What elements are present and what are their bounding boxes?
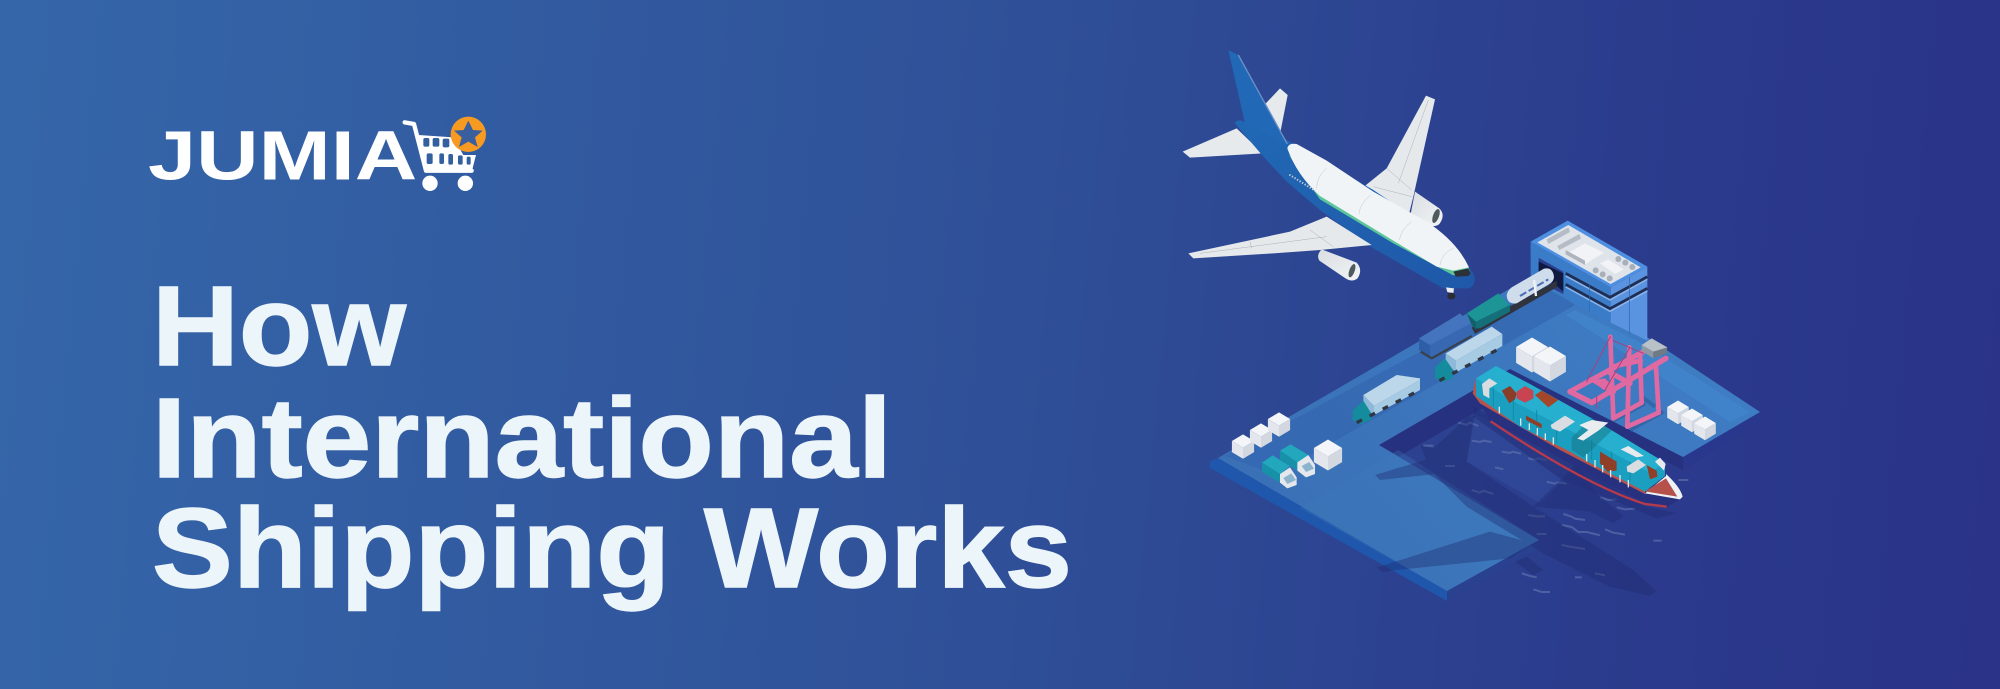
platform sides: [1210, 369, 1760, 601]
port platform: [1210, 277, 1760, 601]
building: [1531, 221, 1647, 341]
title line 3: Shipping Works: [152, 485, 1072, 611]
crane machine house: [1642, 338, 1667, 358]
far engine: [1411, 192, 1443, 226]
building roof: [1531, 221, 1647, 287]
brown and white containers: [1482, 378, 1666, 479]
red deck edge: [1473, 378, 1645, 494]
road strip: [1225, 285, 1575, 475]
crane boom: [1570, 352, 1666, 403]
crane cables: [1587, 337, 1643, 408]
white cargo boxes: [1232, 337, 1716, 471]
landing gear: [1446, 287, 1455, 299]
truck: front lane: [1353, 375, 1420, 424]
crane shadow: [1613, 397, 1663, 430]
truck: rear lane: [1435, 327, 1502, 382]
pink gantry crane: [1570, 337, 1667, 427]
title line 2: International: [152, 375, 892, 501]
bow: [1645, 474, 1683, 499]
title: [152, 263, 1072, 611]
platform deck: [1218, 277, 1760, 591]
logo: Jumia: [148, 116, 486, 194]
logo wordmark: JUMIA: [148, 116, 417, 194]
containers: [1476, 366, 1665, 492]
passenger windows: [1289, 175, 1315, 191]
vertical tail: [1228, 50, 1287, 144]
train: [1419, 268, 1557, 358]
blue container wagon: [1419, 313, 1472, 358]
tank wagon: [1507, 268, 1554, 303]
hull: [1473, 393, 1683, 507]
crane spreader on ship: [1577, 420, 1608, 441]
horizontal stabiliser right: [1264, 88, 1288, 134]
white pillars: [1499, 407, 1628, 487]
fuselage top: [1287, 144, 1469, 271]
airplane: [1183, 50, 1475, 299]
title line 1: How: [152, 263, 407, 389]
hopper wagon: [1467, 293, 1510, 330]
building walls: [1531, 242, 1647, 341]
crane legs: [1610, 337, 1659, 427]
water ripples and light: [1423, 413, 1688, 592]
small teal trucks: [1262, 444, 1315, 488]
icon: shopping cart: [405, 122, 476, 191]
ship shadow: [1473, 407, 1677, 518]
far wing: [1364, 96, 1435, 217]
cockpit windows: [1453, 268, 1471, 277]
icon: orange star badge: [451, 117, 486, 152]
near engine: [1318, 249, 1360, 281]
horizontal stabiliser left: [1183, 128, 1263, 158]
fuselage underside: [1235, 121, 1475, 288]
ship bridge: [1517, 386, 1533, 403]
container ship: [1473, 366, 1683, 518]
green cheatline: [1289, 155, 1470, 275]
near wing: [1188, 217, 1372, 258]
plane shadow: [1375, 415, 1657, 596]
